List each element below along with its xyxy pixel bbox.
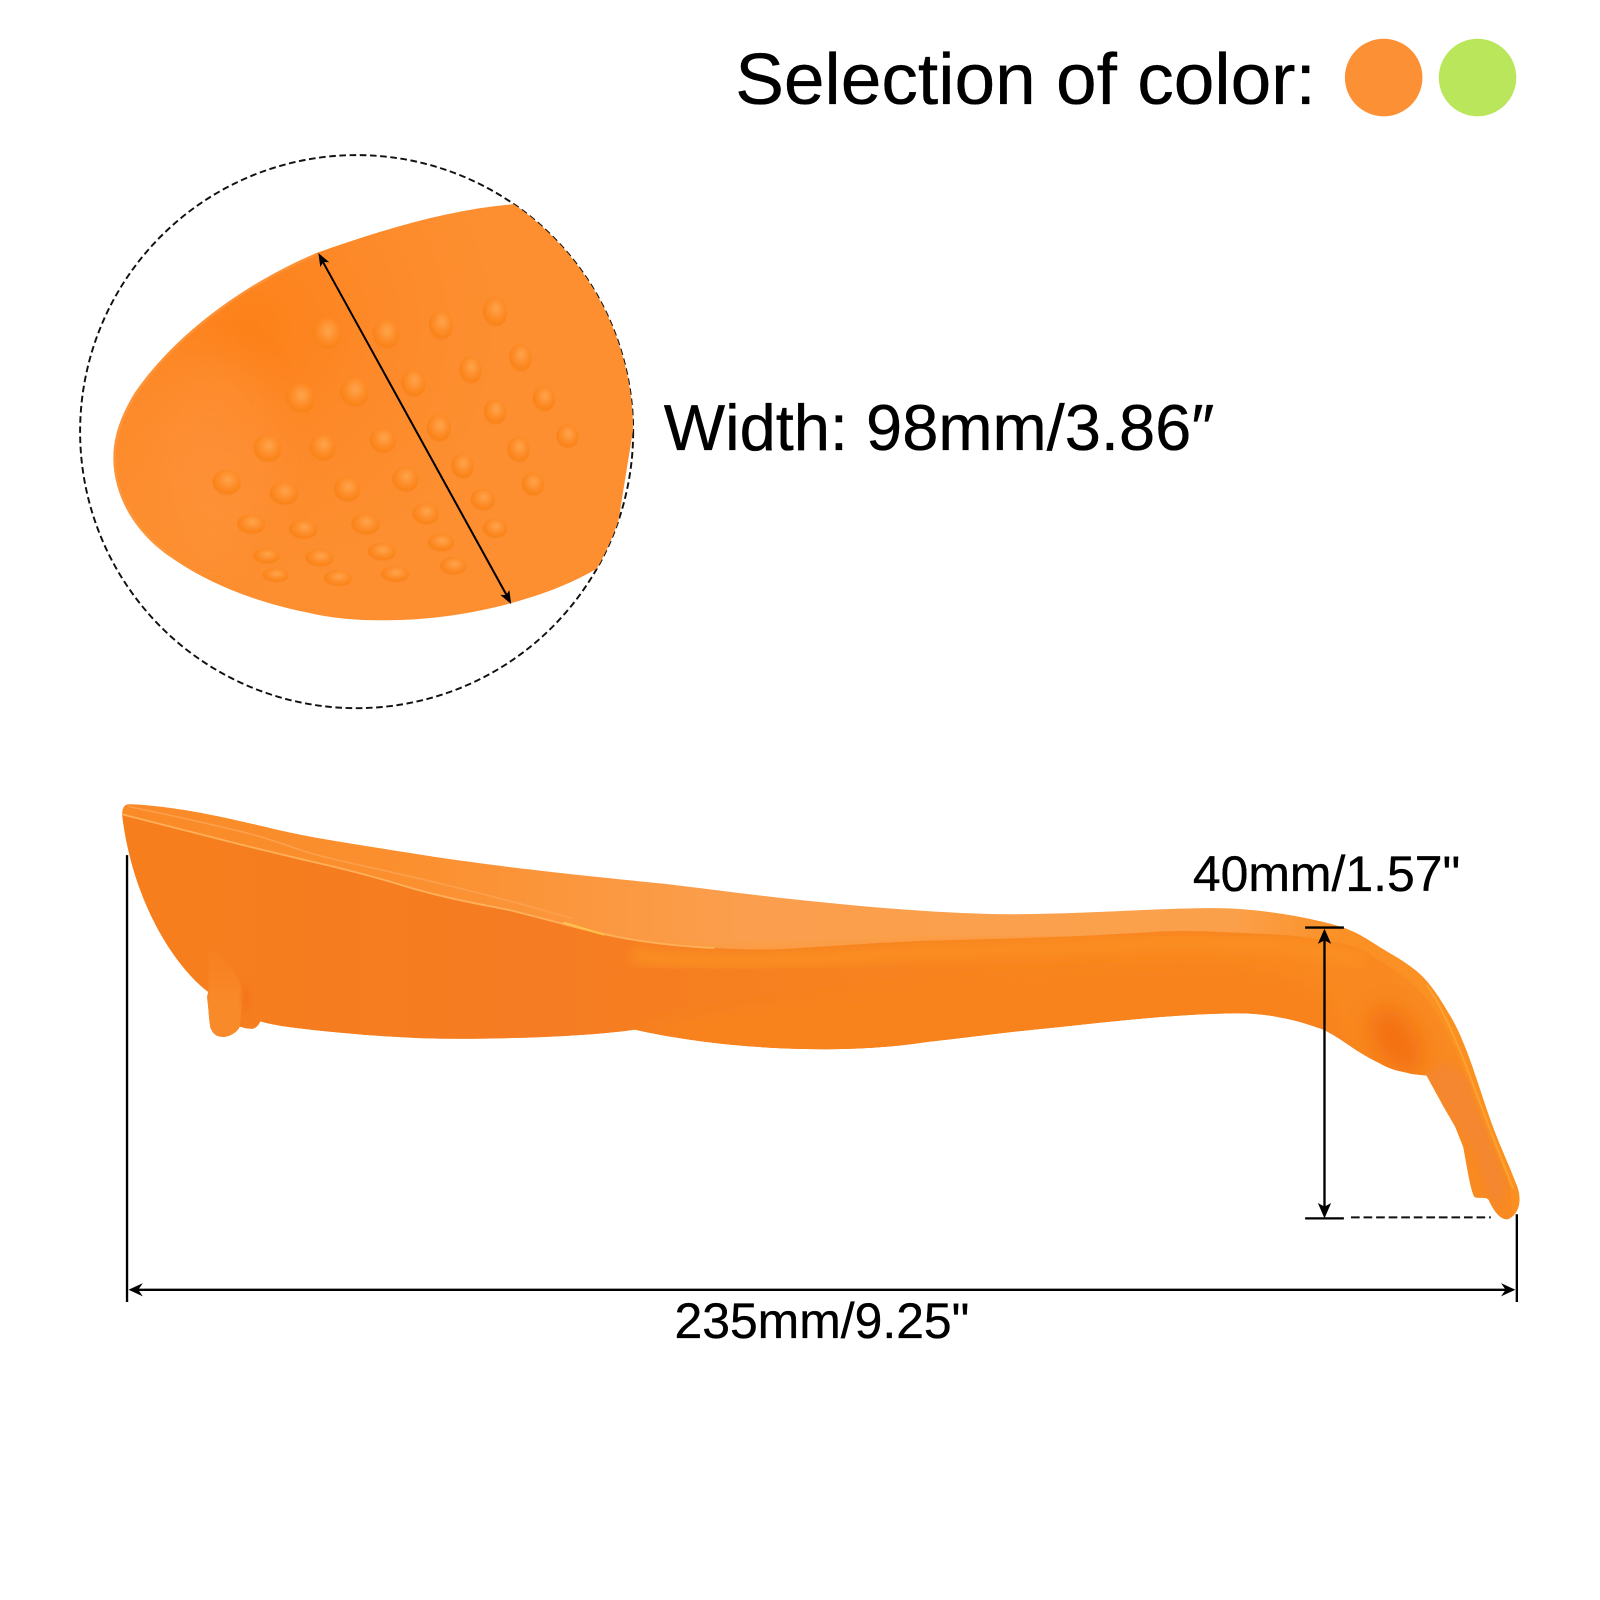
width dimension arrow <box>318 253 511 604</box>
panel: spoon head close-up <box>80 155 643 708</box>
handle underside band <box>646 1013 1355 1050</box>
underside of handle tip <box>1429 1064 1504 1203</box>
spoon head surface <box>102 194 643 633</box>
small yellow glint <box>563 922 604 935</box>
front wall of spoon <box>102 814 1514 1235</box>
dashed magnifier circle <box>80 155 633 708</box>
length dimension <box>127 855 1517 1302</box>
swatch: orange <box>1345 39 1422 116</box>
swatches: available colors <box>1345 39 1516 116</box>
swatch: green <box>1439 39 1516 116</box>
rim highlight at bend <box>1427 985 1513 1189</box>
rim highlight <box>122 814 714 948</box>
glossy band under handle rim <box>633 942 1363 962</box>
inner ridge line <box>128 806 571 918</box>
heading: selection of color: Selection of color: <box>735 39 1316 120</box>
foot shadow <box>242 984 250 1012</box>
inner bowl surface <box>102 786 1531 1235</box>
bend shadow <box>1366 1005 1426 1075</box>
spoon foot <box>208 943 243 1037</box>
height label: 40mm/1.57" <box>1193 846 1460 902</box>
raised dots on spoon head <box>212 297 579 587</box>
length label: 235mm/9.25" <box>674 1293 969 1349</box>
width label: Width: 98mm/3.86″ <box>664 391 1214 464</box>
height dimension <box>1305 928 1491 1218</box>
spoon side view <box>102 786 1531 1235</box>
